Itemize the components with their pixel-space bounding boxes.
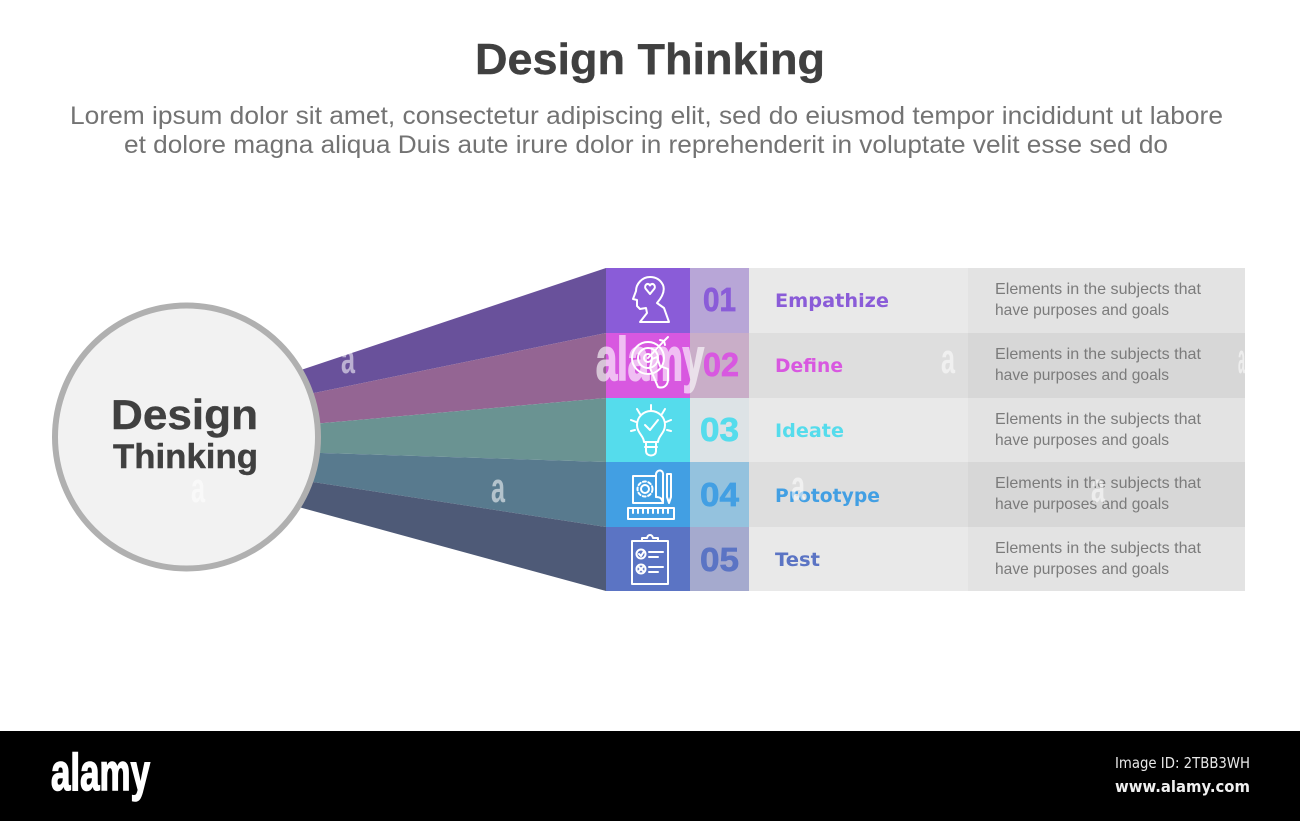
row 4: Prototype: Elements in the subjects that [995, 475, 1202, 492]
row 5: Test: 05 [700, 541, 739, 578]
row 3: Ideate [606, 398, 1245, 462]
row 5: Test: Elements in the subjects that [995, 540, 1202, 557]
row 5: Test: Test [775, 549, 820, 571]
text: a [1238, 335, 1245, 382]
row 2: Define: Elements in the subjects that [995, 346, 1202, 363]
row 3: Ideate: Elements in the subjects that [995, 411, 1202, 428]
row 2: Define [606, 333, 1245, 398]
row 1: Empathize: Elements in the subjects that [995, 281, 1202, 298]
icon: clipboard checklist [632, 535, 668, 584]
row 3: Ideate: 03 [700, 411, 739, 448]
row 2: Define: Define [775, 355, 843, 377]
row 2: Define: have purposes and goals [995, 367, 1169, 384]
icon: light bulb [631, 405, 671, 456]
funnel wedges [273, 268, 606, 591]
footer bar: Image ID: 2TBB3WH [1115, 754, 1250, 772]
watermarks: a [941, 335, 955, 382]
watermarks: a [191, 464, 205, 511]
row 1: Empathize: 01 [703, 281, 736, 318]
row 3: Ideate: Ideate [775, 420, 844, 442]
watermarks: alamy [596, 326, 704, 393]
watermarks: a [491, 464, 505, 511]
row 4: Prototype: 04 [700, 476, 740, 513]
icon: blueprint with ruler and pencil [628, 470, 674, 519]
row 1: Empathize [606, 268, 1245, 333]
row 1: Empathize: have purposes and goals [995, 302, 1169, 319]
row 1: Empathize: Empathize [775, 290, 889, 312]
row 5: Test [606, 527, 1245, 591]
watermarks: a [341, 335, 355, 382]
row 3: Ideate: have purposes and goals [995, 432, 1169, 449]
row 4: Prototype: Prototype [775, 485, 880, 507]
watermarks [191, 326, 1245, 511]
footer bar [0, 731, 1300, 821]
footer logo: alamy [51, 744, 150, 802]
row 4: Prototype [606, 462, 1245, 527]
icon: target with arrow and hand [632, 337, 668, 388]
watermarks: a [791, 462, 805, 509]
title: Design Thinking [475, 35, 825, 84]
center circle [55, 306, 318, 568]
icon: head with heart [633, 277, 669, 322]
center circle: Design [111, 391, 258, 438]
center circle: Thinking [113, 438, 258, 476]
intro text: Lorem ipsum dolor sit amet, consectetur adipiscing elit, sed do eiusmod tempor incididunt ut labore [70, 102, 1223, 130]
intro text: et dolore magna aliqua Duis aute irure dolor in reprehenderit in voluptate velit esse sed do [124, 131, 1168, 159]
footer bar: www.alamy.com [1115, 777, 1250, 796]
row 4: Prototype: have purposes and goals [995, 496, 1169, 513]
watermarks: a [1091, 464, 1105, 511]
row 5: Test: have purposes and goals [995, 561, 1169, 578]
row 2: Define: 02 [703, 346, 739, 383]
intro text [70, 102, 1223, 159]
